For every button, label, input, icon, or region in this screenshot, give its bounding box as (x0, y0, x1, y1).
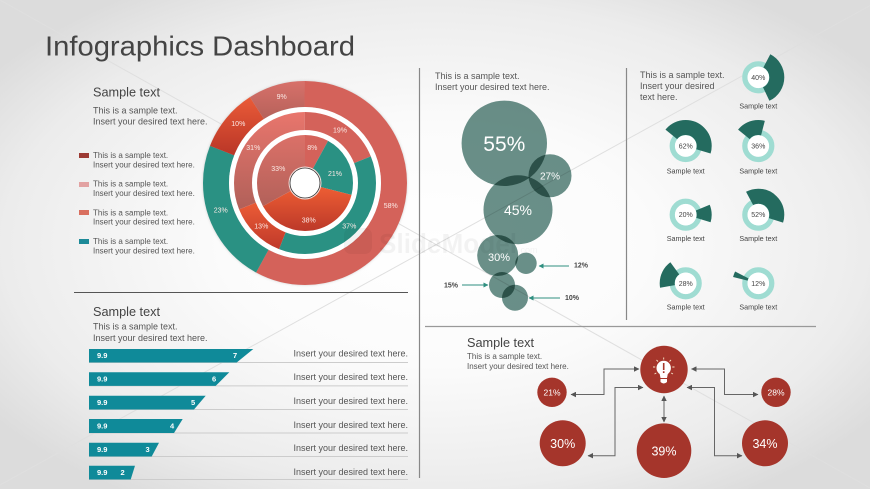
donut labels: 8% (307, 145, 317, 152)
bar row 3 (89, 443, 408, 456)
donut labels: 21% (328, 171, 342, 178)
network hub circle with lightbulb (640, 346, 688, 393)
polar chart 28%: 28% (679, 281, 693, 288)
center hole (288, 166, 322, 200)
panel: network heading: This is a sample text. (467, 352, 542, 361)
bar row 5 (89, 396, 408, 410)
panel: polar charts heading: This is a sample text. (640, 70, 725, 80)
bar row 4: 9.9 (97, 422, 107, 430)
network node 21%: 21% (543, 387, 561, 397)
legend item: dark red: Insert your desired text here. (93, 160, 195, 170)
inner ring (274, 152, 336, 214)
polar chart 36%: 36% (751, 144, 765, 150)
dividers (74, 68, 816, 478)
bar row 5: 5 (191, 398, 195, 407)
watermark: SlideModel (379, 228, 517, 259)
panel: network heading: Insert your desired text here. (467, 362, 569, 371)
panel: bar list heading: Insert your desired text here. (93, 333, 208, 343)
bar row 6 (89, 372, 408, 386)
icon: lightbulb (653, 358, 674, 384)
donut labels: 23% (214, 208, 228, 214)
legend item: salmon: Insert your desired text here. (93, 218, 195, 227)
polar chart 36% (739, 128, 777, 176)
polar chart 40%: 40% (751, 75, 765, 82)
legend item: pink (79, 180, 195, 198)
network node 34% (742, 420, 788, 466)
bar row 2: 9.9 (97, 468, 107, 477)
bar row 6: Insert your desired text here. (293, 372, 408, 382)
bar row 4: 4 (170, 422, 175, 430)
callout 12%: 12% (574, 262, 589, 270)
panel: donut heading (93, 86, 208, 126)
panel: donut heading: Sample text (93, 86, 160, 100)
legend item: teal: This is a sample text. (93, 237, 168, 246)
bar row 2 (89, 466, 408, 480)
panel: bubble heading (435, 71, 550, 92)
middle ring (243, 121, 367, 245)
polar chart 20%: 20% (679, 212, 693, 219)
network node 30% (540, 420, 586, 466)
panel: polar charts heading: Insert your desired (640, 81, 715, 91)
donut labels: 38% (302, 218, 316, 224)
polar chart 62% (667, 128, 705, 176)
panel: bubble heading: Insert your desired text here. (435, 82, 550, 92)
bubble chart (462, 101, 572, 311)
polar chart 20%: Sample text (667, 234, 705, 243)
bar row 6: 9.9 (97, 374, 107, 383)
watermark: .com (518, 245, 538, 255)
bar row 4 (89, 419, 408, 433)
bar row 3: 3 (146, 445, 150, 454)
donut labels: 33% (271, 166, 285, 173)
legend item: teal: Insert your desired text here. (93, 247, 195, 256)
network node 28%: 28% (767, 387, 785, 397)
network node 39%: 39% (651, 444, 677, 458)
bar row 7: 7 (233, 351, 237, 360)
polar chart 28% (667, 265, 705, 312)
callout 12% (539, 262, 589, 270)
polar chart 52% (739, 196, 777, 243)
bubble chart: 27% (540, 172, 560, 182)
legend item: salmon (79, 208, 195, 227)
network node 34%: 34% (752, 437, 778, 451)
donut labels (214, 94, 398, 230)
callout 15% (444, 282, 488, 290)
network node 30%: 30% (550, 437, 575, 451)
polar chart 52%: Sample text (739, 234, 777, 243)
polar chart 20% (667, 196, 705, 243)
callout 10% (529, 295, 580, 302)
network node 28% (761, 378, 791, 407)
bar row 7 (89, 348, 408, 362)
polar chart 62%: Sample text (667, 166, 705, 176)
bubble callout arrows (444, 262, 589, 302)
donut labels: 10% (231, 121, 245, 128)
panel: bubble heading: This is a sample text. (435, 71, 520, 81)
legend item: pink: Insert your desired text here. (93, 189, 195, 198)
panel: network heading: Sample text (467, 336, 534, 350)
bar row 2: Insert your desired text here. (293, 467, 408, 477)
bubble chart: 30% (488, 252, 510, 264)
panel: polar charts heading (640, 70, 725, 102)
legend item: pink: This is a sample text. (93, 180, 168, 189)
panel: network heading (467, 336, 569, 371)
bar row 6: 6 (212, 374, 216, 383)
panel: donut heading: This is a sample text. (93, 106, 178, 116)
bar row 3: 9.9 (97, 445, 107, 454)
title: Infographics Dashboard (45, 30, 355, 62)
donut labels: 19% (333, 128, 347, 134)
donut chart (203, 81, 407, 285)
bar row 7: Insert your desired text here. (293, 348, 408, 358)
network connector arrows (571, 369, 758, 456)
panel: donut heading: Insert your desired text here. (93, 116, 208, 126)
legend item: dark red: This is a sample text. (93, 151, 168, 160)
panel: polar charts heading: text here. (640, 92, 678, 102)
polar chart 12% (739, 265, 777, 312)
bar row 7: 9.9 (97, 351, 107, 360)
bubble chart: 55% (483, 133, 525, 156)
donut labels: 31% (246, 145, 260, 152)
outer ring (216, 94, 394, 272)
bar row 2: 2 (120, 468, 125, 477)
bar list (89, 348, 408, 480)
polar chart 52%: 52% (751, 212, 765, 219)
donut labels: 58% (384, 203, 398, 210)
network node 39% (637, 423, 691, 478)
bubble chart: 45% (504, 202, 532, 218)
bar row 5: Insert your desired text here. (293, 396, 408, 406)
bar row 3: Insert your desired text here. (293, 443, 408, 453)
legend item: teal (79, 237, 195, 256)
polar chart 40%: Sample text (739, 102, 777, 110)
legend item: salmon: This is a sample text. (93, 208, 168, 217)
polar chart 40% (739, 59, 777, 110)
bar row 5: 9.9 (97, 398, 107, 407)
bar row 4: Insert your desired text here. (293, 420, 408, 430)
polar chart 36%: Sample text (739, 166, 777, 176)
callout 10%: 10% (565, 295, 580, 302)
polar chart 28%: Sample text (667, 302, 705, 312)
polar chart 62%: 62% (679, 144, 693, 150)
panel: bar list heading: Sample text (93, 305, 160, 319)
legend item: dark red (79, 151, 195, 170)
network node 21% (537, 378, 567, 407)
donut labels: 9% (277, 94, 287, 101)
legend (79, 151, 195, 256)
donut labels: 37% (342, 224, 356, 230)
polar chart 12%: Sample text (739, 302, 777, 312)
donut labels: 13% (254, 224, 268, 230)
polar chart 12%: 12% (751, 281, 765, 288)
panel: bar list heading: This is a sample text. (93, 322, 178, 332)
panel: bar list heading (93, 305, 208, 343)
callout 15%: 15% (444, 282, 459, 290)
